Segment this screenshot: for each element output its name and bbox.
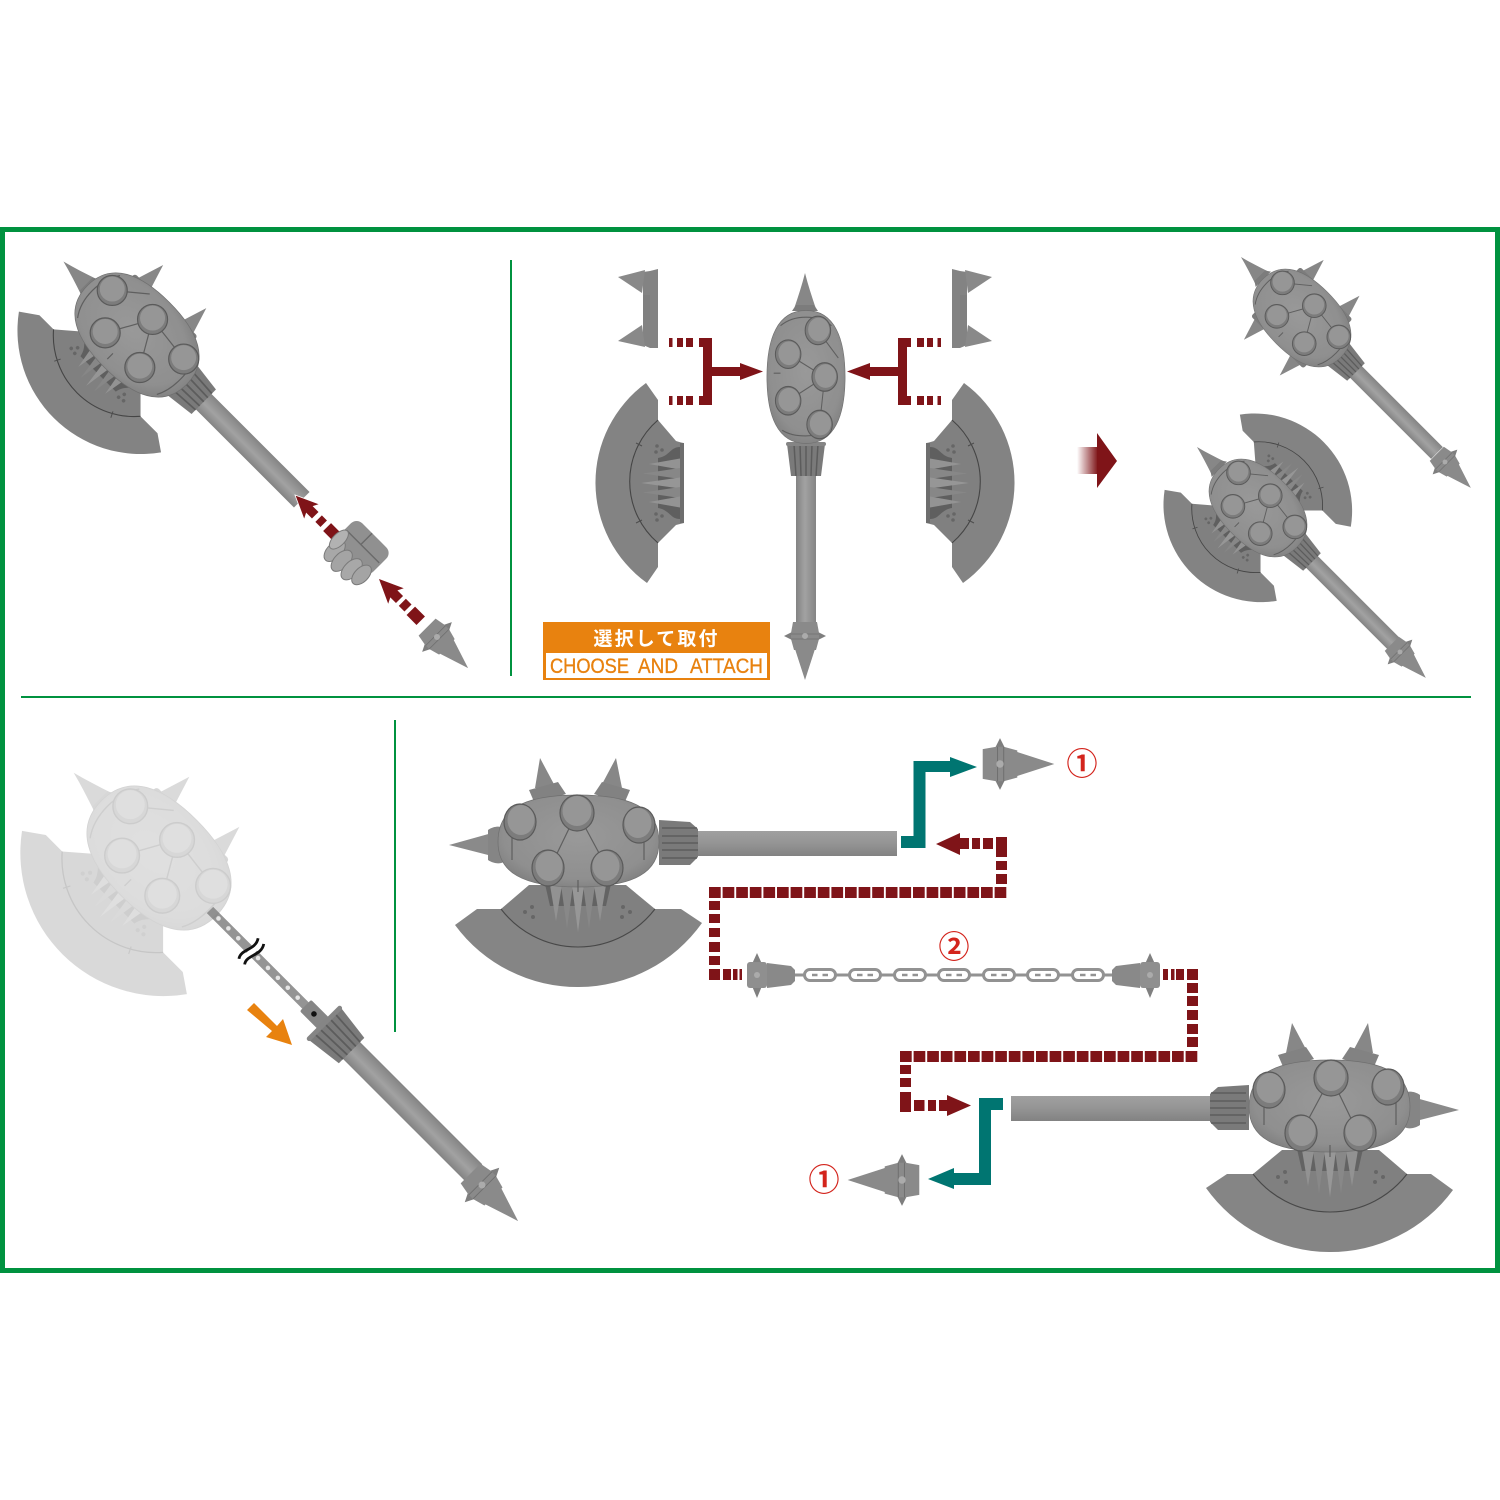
scene: chain extended (0, 717, 535, 1238)
end cap (453, 1156, 535, 1238)
number two: ② (938, 930, 970, 965)
label: choose and attach: CHOOSE (550, 655, 629, 678)
result: double blade axe (1131, 381, 1461, 711)
spike parts left (618, 269, 658, 348)
orange arrow (247, 1003, 292, 1045)
label: choose and attach: AND (638, 655, 678, 678)
number one lower: ① (808, 1163, 840, 1198)
spike parts right (952, 269, 992, 348)
label: choose and attach (543, 622, 770, 680)
blade right (926, 383, 1015, 583)
chain strip (200, 900, 334, 1034)
arrow to shaft (287, 487, 344, 544)
divider (21, 696, 1471, 698)
divider (394, 720, 396, 1032)
divider (510, 260, 512, 676)
dashed route upper (709, 833, 1007, 980)
chain part two (747, 953, 1160, 998)
icon: fist (316, 516, 393, 592)
bracket arrow left (669, 338, 763, 405)
teal arrow out lower (928, 1098, 1003, 1189)
scene: parts exploded (543, 269, 1117, 680)
end cap (412, 612, 483, 683)
dashed route lower (900, 969, 1198, 1116)
result: mace without blades (1201, 217, 1483, 500)
bracket arrow right (847, 338, 941, 405)
faded axe head (0, 717, 297, 1036)
number one: ① (1066, 747, 1098, 782)
shaft and collar (306, 1005, 491, 1190)
teal arrow out (901, 757, 977, 848)
label: choose and attach: 選択して取付 (594, 628, 718, 650)
scene: axe with hand and end cap (0, 213, 483, 683)
big arrow (1077, 433, 1117, 488)
green frame (2, 230, 1498, 1270)
blade left (595, 383, 684, 583)
label: choose and attach: ATTACH (690, 655, 763, 678)
axe top view with shaft (449, 758, 897, 987)
end cap part one lower (848, 1154, 919, 1206)
axe top view mirrored (1011, 1023, 1459, 1252)
arrow to fist (371, 571, 428, 628)
end cap part one (983, 738, 1054, 790)
mace vertical (767, 273, 845, 680)
axe assembled three-quarter view (0, 213, 350, 583)
